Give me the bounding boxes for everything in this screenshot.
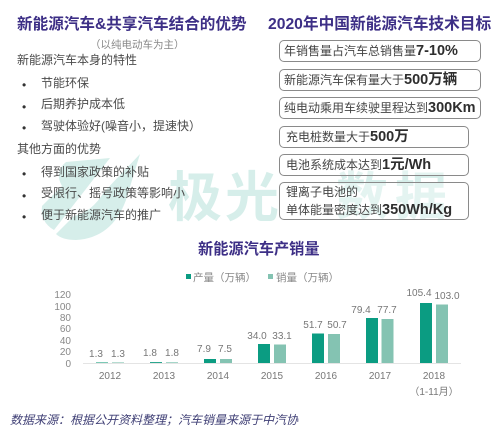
watermark xyxy=(42,154,454,240)
legend: 产量（万辆） xyxy=(193,271,256,284)
source note: 数据来源：根据公开资料整理；汽车销量来源于中汽协 xyxy=(10,413,298,427)
x axis labels: （1-11月） xyxy=(409,386,459,398)
value labels: 105.4 xyxy=(406,288,432,299)
watermark: 数据 xyxy=(336,169,454,227)
target box 6 xyxy=(279,182,469,220)
y axis labels: 0 xyxy=(65,359,71,370)
feature heading: 新能源汽车本身的特性 xyxy=(17,53,137,67)
x axis labels: 2012 xyxy=(99,371,122,382)
target box 3: 纯电动乘用车续驶里程达到300Km xyxy=(284,100,476,116)
x axis labels: 2016 xyxy=(315,371,338,382)
y axis labels: 120 xyxy=(54,290,71,301)
target box 6: 锂离子电池的 xyxy=(286,185,358,199)
target box 4: 充电桩数量大于500万 xyxy=(286,129,409,145)
target box 1 xyxy=(279,40,481,62)
feature item 1: 节能环保 xyxy=(41,76,89,90)
x axis labels: 2017 xyxy=(369,371,392,382)
advantage item 2: 受限行、摇号政策等影响小 xyxy=(41,186,185,200)
bullets: advantage list: • xyxy=(22,167,26,181)
value labels: 1.8 xyxy=(165,348,179,359)
advantage item 1: 得到国家政策的补贴 xyxy=(41,165,149,179)
value labels xyxy=(89,288,460,360)
value labels: 7.9 xyxy=(197,344,211,355)
feature item 2: 后期养护成本低 xyxy=(41,97,125,111)
target box 5: 电池系统成本达到1元/Wh xyxy=(286,157,431,173)
x axis labels: 2013 xyxy=(153,371,176,382)
value labels: 7.5 xyxy=(218,344,232,355)
target box 2: 新能源汽车保有量大于500万辆 xyxy=(284,72,457,88)
value labels: 33.1 xyxy=(272,331,292,342)
x axis labels xyxy=(99,371,459,398)
advantage item 3: 便于新能源汽车的推广 xyxy=(41,208,161,222)
target box 6: 单体能量密度达到350Wh/Kg xyxy=(286,202,452,218)
y axis labels: 40 xyxy=(60,336,71,347)
y axis labels: 100 xyxy=(54,302,71,313)
bullets: feature list: • xyxy=(22,121,26,135)
bullets: advantage list xyxy=(22,167,26,224)
target box 5 xyxy=(279,154,469,176)
value labels: 79.4 xyxy=(351,305,371,316)
y axis labels xyxy=(54,290,71,370)
advantages heading: 其他方面的优势 xyxy=(17,142,101,156)
heading: chart title: 新能源汽车产销量 xyxy=(198,241,320,258)
bullets: advantage list: • xyxy=(22,210,26,224)
bullets: feature list xyxy=(22,78,26,135)
value labels: 1.8 xyxy=(143,348,157,359)
x axis labels: 2018 xyxy=(423,371,446,382)
bullets: feature list: • xyxy=(22,100,26,114)
y axis labels: 60 xyxy=(60,324,71,335)
value labels: 1.3 xyxy=(89,349,103,360)
y axis labels: 20 xyxy=(60,347,71,358)
watermark: 极光 xyxy=(168,168,282,228)
bullets: advantage list: • xyxy=(22,188,26,202)
bars xyxy=(96,303,448,363)
x axis labels: 2014 xyxy=(207,371,230,382)
bar chart xyxy=(54,288,461,370)
value labels: 50.7 xyxy=(327,320,347,331)
value labels: 77.7 xyxy=(377,305,397,316)
legend xyxy=(186,271,336,284)
heading: left panel title: 新能源汽车&共享汽车结合的优势 xyxy=(17,16,247,33)
target box 2 xyxy=(279,69,481,91)
y axis labels: 80 xyxy=(60,313,71,324)
value labels: 103.0 xyxy=(434,291,460,302)
feature item 3: 驾驶体验好(噪音小，提速快） xyxy=(41,119,201,133)
target box 3 xyxy=(279,97,481,119)
target box 4 xyxy=(279,126,469,148)
heading: right panel title: 2020年中国新能源汽车技术目标 xyxy=(268,16,491,33)
panel: other advantages xyxy=(17,142,185,222)
value labels: 51.7 xyxy=(303,320,323,331)
bullets: feature list: • xyxy=(22,78,26,92)
target box 1: 年销售量占汽车总销售量7-10% xyxy=(284,43,458,59)
subtitle: （以纯电动车为主） xyxy=(90,39,184,51)
value labels: 1.3 xyxy=(111,349,125,360)
value labels: 34.0 xyxy=(247,331,267,342)
panel: new energy vehicle features xyxy=(17,53,201,133)
x axis labels: 2015 xyxy=(261,371,284,382)
